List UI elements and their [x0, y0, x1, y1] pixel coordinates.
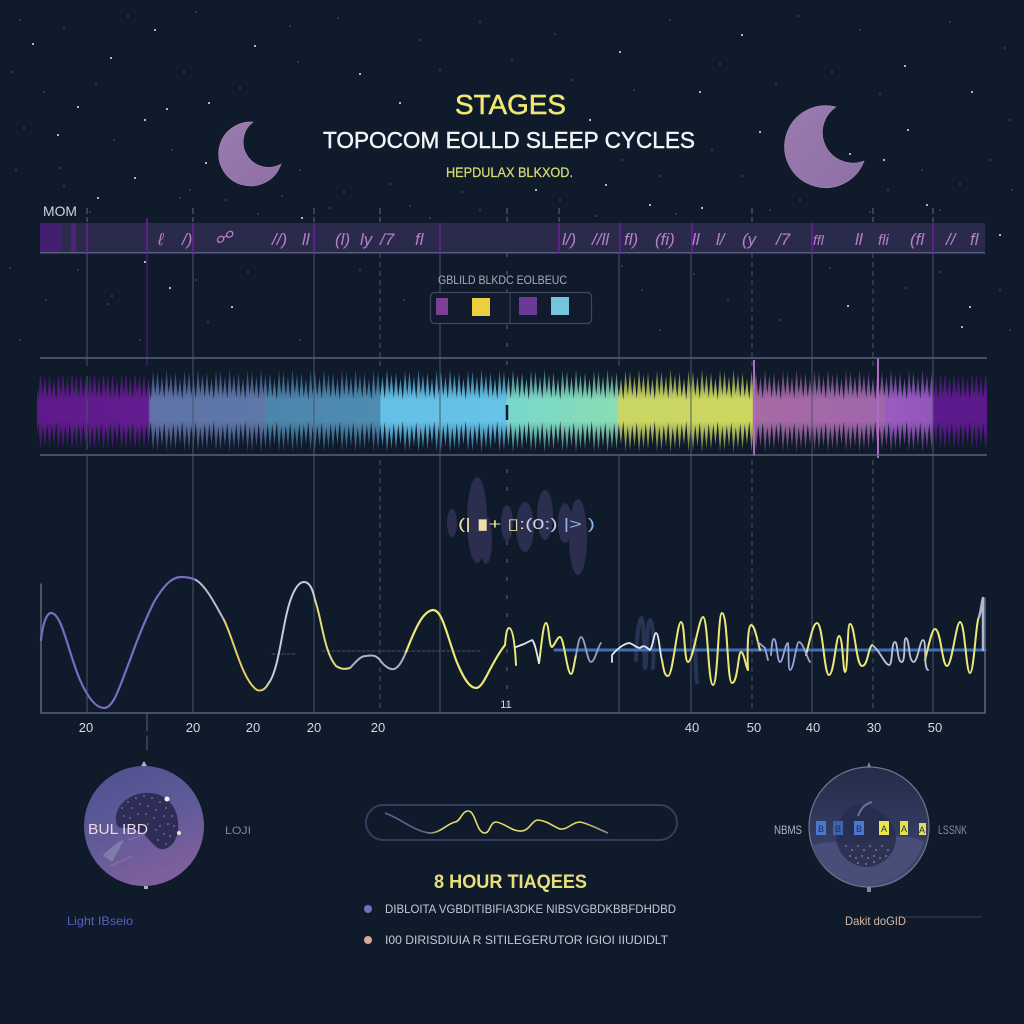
heading: sleep cycles: TOPOCOM EOLLD SLEEP CYCLES: [323, 127, 695, 153]
icon: brain bowl: [836, 802, 896, 867]
axis labels: 20: [371, 720, 385, 735]
burst label: (| ▮+ ▯: (0:) |> ): [458, 516, 595, 533]
strip labels: fl: [415, 230, 425, 249]
heading: 8 hour: 8 HOUR TIAQEES: [434, 872, 587, 893]
axis labels: 11: [500, 699, 512, 711]
label: light sleep: Light IBseio: [67, 914, 133, 928]
label: left side: LOJI: [225, 825, 251, 837]
lilac hump: [350, 652, 406, 669]
icon: brain: [103, 793, 179, 866]
strip labels: ffl: [813, 232, 825, 248]
label: nbms: NBMS: [774, 823, 802, 837]
yellow wave: [406, 610, 505, 688]
axes: [41, 584, 985, 713]
legend box: [430, 292, 592, 324]
lilac rise: [268, 582, 315, 684]
strip labels: /7: [775, 230, 791, 249]
panel: timeline strip: [40, 218, 985, 372]
mini sleep curve: [385, 811, 608, 833]
globe label: BUL IBD: [88, 821, 148, 838]
chart: sleep stage waveform: [37, 358, 987, 458]
strip labels: ☍: [215, 228, 234, 247]
strip labels: //: [945, 230, 958, 249]
yellow fall: [315, 600, 350, 669]
axis labels: 50: [928, 720, 942, 735]
axis labels: 40: [806, 720, 820, 735]
axis labels: 20: [307, 720, 321, 735]
axis labels: 50: [747, 720, 761, 735]
subtitle: HEPDULAX BLKXOD.: [446, 164, 573, 180]
list item 2: I00 DIRISDIUIA R SITILEGERUTOR IGIOI IIUDIDLT: [385, 933, 669, 947]
mid section lilac: [576, 637, 601, 662]
status chips: B: [835, 824, 841, 834]
strip labels: fl: [970, 230, 980, 249]
list item 1: DIBLOITA VGBDITIBIFIA3DKE NIBSVGBDKBBFDHDBD: [385, 902, 676, 916]
status chips: A: [919, 825, 925, 835]
strip labels: /7: [379, 230, 395, 249]
legend swatches: [436, 297, 569, 316]
icon: right crescent moon: [785, 106, 864, 188]
grid lines: [87, 208, 933, 713]
label: lssnk: LSSNK: [938, 823, 967, 837]
lilac fade: [196, 580, 224, 620]
strip labels: //ll: [591, 230, 610, 249]
purple segment: [41, 577, 196, 708]
legend title: GBLILD BLKDC EOLBEUC: [438, 273, 567, 287]
strip labels: ll: [855, 230, 864, 249]
status chips: B: [818, 824, 824, 834]
axis labels: 20: [79, 720, 93, 735]
axis labels: 30: [867, 720, 881, 735]
panel: light sleep brain globe: [84, 761, 204, 889]
strip labels: (y: [742, 230, 758, 249]
strip labels: (fl: [910, 230, 925, 249]
mid section white curls: [612, 633, 662, 662]
strip labels: /): [181, 230, 192, 249]
status chips: A: [881, 824, 887, 834]
right yellow waves: [662, 613, 760, 685]
panel: deep sleep globe: [809, 762, 929, 892]
strip labels: (fi): [655, 230, 675, 249]
mid section white: [516, 640, 539, 663]
yellow drop: [224, 620, 268, 691]
ghost bursts: [636, 618, 697, 682]
strip labels: //): [271, 230, 287, 249]
starfield: [10, 12, 1012, 340]
label: deep sleep: [845, 914, 982, 928]
strip labels: ll: [302, 230, 311, 249]
strip labels: fli: [878, 232, 890, 249]
strip labels: ly: [360, 230, 374, 249]
chart: mini burst with label: [447, 477, 595, 575]
status chips: A: [901, 824, 907, 834]
strip labels: fl): [624, 230, 638, 249]
panel: trend pill: [366, 805, 677, 840]
axis labels: [79, 699, 942, 735]
axis labels: 20: [246, 720, 260, 735]
chart: sleep line graph: [41, 577, 985, 750]
strip labels: [157, 228, 980, 249]
status chips: B: [856, 824, 862, 834]
heading: stages: STAGES: [455, 89, 566, 120]
title block: [323, 89, 695, 180]
status chips: [816, 821, 926, 835]
strip labels: l/): [562, 230, 576, 249]
icon: left crescent moon: [219, 122, 281, 186]
strip labels: (l): [335, 230, 350, 249]
right lilac waves: [758, 639, 810, 670]
axis labels: 20: [186, 720, 200, 735]
legend: [430, 273, 592, 324]
label: deep sleep: Dakit doGID: [845, 914, 906, 928]
axis labels: 40: [685, 720, 699, 735]
strip labels: l/: [716, 230, 727, 249]
strip labels: ℓ: [157, 230, 164, 249]
strip labels: ll: [692, 230, 701, 249]
label: mom: MOM: [43, 203, 77, 219]
mid section yellow: [505, 623, 576, 674]
baseline: [555, 648, 985, 652]
